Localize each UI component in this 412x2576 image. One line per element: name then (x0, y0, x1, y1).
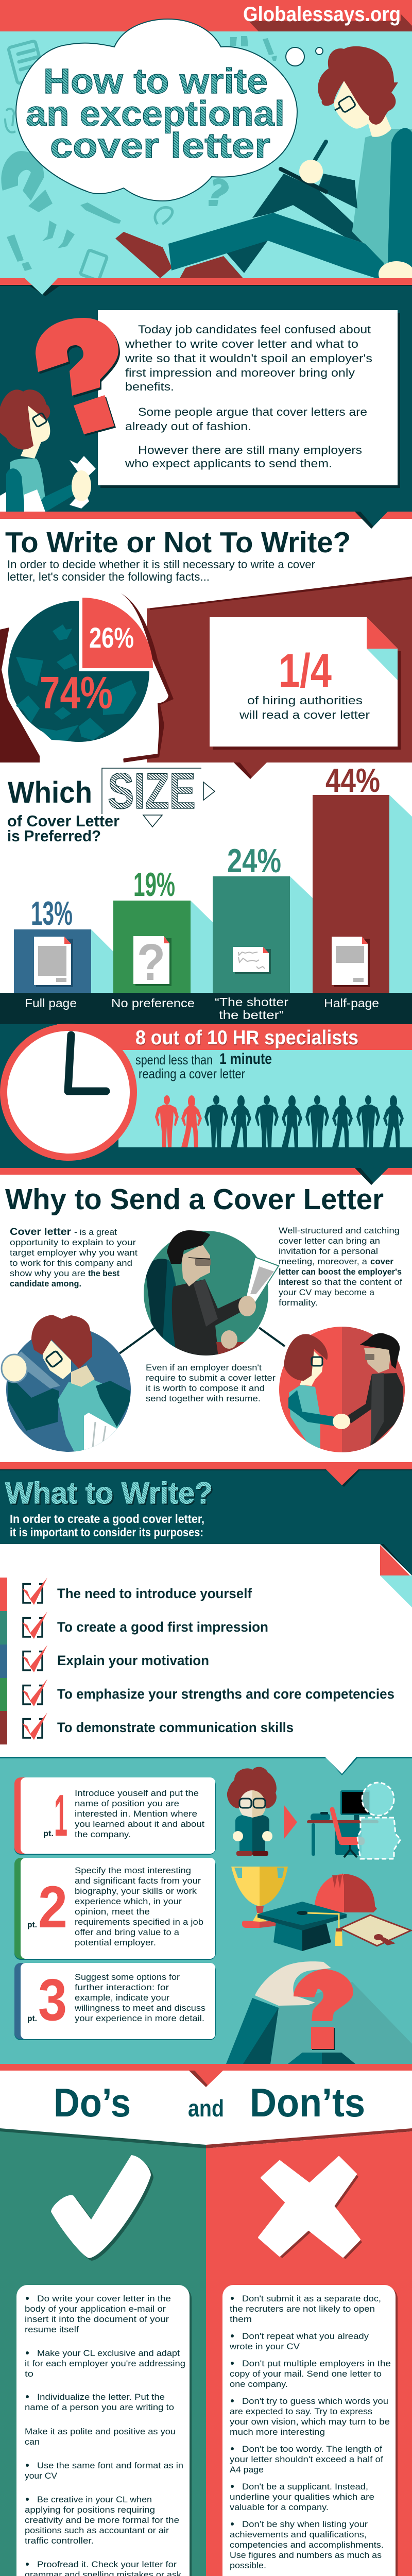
card: donts list: them (230, 2315, 252, 2324)
card: donts list: competencies and accomplishments. (230, 2540, 384, 2550)
panel: HR specialists: 8 out of 10 HR specialists (135, 1027, 358, 1049)
panel: intro text card: However there are still many employers (138, 444, 362, 456)
card: donts list: underline your qualities which are (230, 2493, 374, 2502)
chart: head pie: 74% (40, 667, 113, 718)
card: dos list: Individualize the letter. Put the (37, 2393, 165, 2402)
heading: which size: SIZE (108, 762, 196, 819)
panel: intro text card: benefits. (125, 380, 174, 393)
chart labels band: “The shotter (215, 995, 288, 1009)
card: donts list: Don't be too wordy. The length of (242, 2445, 382, 2454)
card: dos list: name of a person you are writing to (25, 2403, 174, 2412)
text block: cover letter definition: show why you are (10, 1269, 85, 1278)
header band (0, 0, 412, 31)
card: donts list: much more interesting (230, 2428, 325, 2437)
text block: well-structured letter: so that the content of (312, 1278, 402, 1287)
checklist: purposes: Explain your motivation (57, 1653, 209, 1668)
what to write header: In order to create a good cover letter, (10, 1512, 204, 1526)
text block: cover letter definition: opportunity to explain to your (10, 1238, 136, 1247)
illustration: vacant desk (307, 1783, 401, 1859)
card: donts list: Don't be a supplicant. Instead, (242, 2482, 368, 2492)
card: donts list: wrote in your CV (229, 2342, 300, 2351)
card: point 2: biography, your skills or work (75, 1887, 197, 1896)
card: donts list: Don't try to guess which words you (242, 2397, 388, 2406)
card: point 1: you learned about it and about (75, 1820, 204, 1829)
checklist: purposes: To demonstrate communication skills (57, 1720, 294, 1735)
icon: half page document (332, 937, 370, 987)
card: point 3: pt. (27, 2014, 37, 2023)
card: dos list (16, 2285, 192, 2576)
card: point 2: opinion, meet the (75, 1907, 150, 1917)
card: dos list: applying for positions requiring (25, 2505, 155, 2515)
heading: dos and donts: Do’s (54, 2080, 131, 2125)
checklist: purposes: To emphasize your strengths and core competencies (57, 1686, 394, 1702)
text block: well-structured letter: Well-structured and catching (279, 1226, 400, 1235)
card: dos list: Be creative in your CL when (37, 2495, 152, 2504)
text block: even if not required: it is worth to compose it and (146, 1384, 265, 1393)
text block: well-structured letter: meeting, moreover, a (279, 1257, 368, 1266)
card: dos list: to (25, 2369, 33, 2379)
card: dos list: resume itself (25, 2325, 79, 2334)
thought cloud with title: an exceptional (26, 94, 285, 133)
text block: cover letter definition: the best (88, 1269, 119, 1278)
panel: HR specialists: 8 out of 10 HR specialists (136, 1028, 359, 1050)
card: donts list: are expected to say. Try to express (230, 2407, 372, 2416)
panel: HR specialists: spend less than (135, 1052, 213, 1067)
card: dos list: creativity and be more formal for the (25, 2516, 179, 2525)
text block: even if not required (146, 1363, 276, 1403)
hero person writing (115, 46, 412, 287)
panel: HR specialists: reading a cover letter (139, 1066, 245, 1081)
panel: HR specialists: 1 minute (219, 1050, 272, 1067)
card: point 2: 2 (38, 1874, 67, 1940)
header logo: Globalessays.org (243, 3, 401, 26)
panel: tips background (0, 1756, 412, 2064)
card: dos list: Do write your cover letter in the (37, 2294, 171, 2303)
panel: intro text card: write so that it wouldn't spoil an employer's (125, 352, 372, 365)
illustration: curly-haired person (227, 1767, 277, 1856)
card: point 3: Suggest some options for (75, 1973, 180, 1982)
text block: well-structured letter: invitation for a personal (279, 1247, 378, 1256)
panel: intro text card: first impression and moreover bring only (125, 366, 355, 379)
card: point 1: interested in. Mention where (75, 1809, 197, 1819)
card: point 3: 3 (38, 1967, 67, 2033)
illustration: trophy (231, 1867, 288, 1928)
card: dos list: Make your CL exclusive and adapt (37, 2349, 180, 2358)
bar chart: cover letter size (14, 761, 412, 993)
thought cloud with title: cover letter (50, 126, 270, 165)
card: point 1: name of position you are (75, 1799, 179, 1808)
card: point 1: Introduce youself and put the (75, 1789, 199, 1798)
person holding scroll (0, 389, 96, 512)
card: dos list: can (25, 2437, 40, 2447)
illustration: hand with question mark (226, 1961, 412, 2064)
heading: dos and donts: and (188, 2095, 224, 2122)
chart labels band: Full page (25, 996, 77, 1010)
section band (0, 512, 412, 529)
connector lines (119, 1328, 285, 1353)
bar chart: cover letter size: 13% (31, 894, 73, 932)
intro top band (0, 278, 412, 296)
checklist: purposes: To create a good first impression (57, 1619, 268, 1635)
card: donts list: one company. (230, 2380, 288, 2389)
chart labels band: the better” (219, 1008, 284, 1022)
panel: HR specialists (0, 1024, 412, 1168)
icon: clock (0, 1024, 137, 1161)
card: dos list: Proofread it. Check your letter for (37, 2560, 177, 2569)
heading: why to send a cover letter: Why to Send a Cover Letter (5, 1183, 384, 1216)
card: donts list: A4 page (230, 2465, 264, 2475)
callout: 1/4 note (210, 617, 401, 750)
what to write header: What to Write? (7, 1478, 214, 1512)
card: donts list: your letter shouldn't exceed a half of (230, 2455, 383, 2464)
card: dos list: Make it as polite and positive as you (25, 2427, 176, 2436)
card: donts list: valuable for a company. (230, 2503, 329, 2512)
panel: intro text card: whether to write cover letter and what to (125, 337, 358, 350)
card: point 3 (14, 1963, 216, 2040)
card: donts list: the recruters are not likely to open (230, 2304, 375, 2314)
thought cloud with title: How to write (43, 61, 268, 101)
text block: even if not required: send together with resume. (146, 1394, 261, 1403)
panel: intro text card: Some people argue that cover letters are (138, 405, 367, 418)
text block: facts intro (7, 558, 315, 583)
card: point 2: potential employer. (75, 1938, 156, 1947)
bar chart: cover letter size: 24% (227, 842, 281, 879)
arrow (284, 1805, 297, 1839)
card: dos list: positions such as accountant or air (25, 2526, 169, 2535)
heading: dos and donts (54, 2080, 365, 2125)
card: donts list: copy of your mail. Send one letter to (230, 2369, 382, 2379)
card: point 2: Specify the most interesting (75, 1866, 191, 1875)
heading: which size: Which (8, 776, 92, 809)
illustration: graduation cap (258, 1902, 347, 1951)
text block: well-structured letter: cover letter can bring an (279, 1236, 380, 1246)
icon: question document: ? (137, 934, 165, 991)
section band (0, 1168, 412, 1185)
illustration: diploma (340, 1915, 411, 1946)
card: point 1 (14, 1777, 216, 1855)
text block: well-structured letter: letter can boost the employer's (279, 1267, 402, 1277)
text block: cover letter definition: - is a great (74, 1228, 117, 1237)
what to write header (0, 1462, 412, 1544)
pointer (234, 762, 267, 779)
card: dos list: your CV (25, 2471, 57, 2481)
card: donts list: Don’t be shy when listing your (242, 2520, 368, 2529)
card: point 2 (14, 1858, 216, 1960)
panel: intro text card: who expect applicants to send them. (125, 457, 332, 470)
checklist: purposes (22, 1578, 394, 1740)
chart labels band (0, 993, 412, 1024)
card: dos list: Use the same font and format as in (37, 2461, 183, 2470)
card: donts list (222, 2285, 398, 2576)
panel: intro text card: Today job candidates feel confused about (138, 323, 371, 336)
card: dos list: body of your application e-mail or (25, 2304, 166, 2314)
card: point 3: your experience in more detail. (75, 2014, 204, 2023)
text block: cover letter definition (10, 1227, 138, 1289)
card: donts list: possible. (230, 2561, 266, 2570)
panel: intro text card: already out of fashion. (125, 420, 251, 433)
card: donts list: achievements and qualifications, (230, 2530, 367, 2539)
card: donts list: Use figures and numbers as much as (230, 2551, 382, 2560)
illustration: reader in armchair (144, 1230, 279, 1360)
panel: facts background (0, 577, 412, 762)
text block: well-structured letter: formality. (279, 1298, 318, 1308)
chart labels band: Half-page (324, 996, 379, 1010)
card: dos list: traffic controller. (25, 2536, 94, 2546)
bar chart: cover letter size: 19% (133, 866, 175, 903)
card: point 3: further interaction: for (75, 1983, 169, 1992)
panel: intro background (0, 285, 412, 512)
heading: to write or not to write: To Write or Not To Write? (5, 526, 351, 559)
illustration: handshake (279, 1327, 405, 1455)
icon: big question mark (36, 318, 120, 436)
side colour strips (0, 1578, 7, 1744)
chart labels band: No preference (111, 996, 195, 1010)
card: dos list: it for each employer you're addressing (25, 2359, 185, 2368)
card: point 1: the company. (75, 1830, 131, 1839)
heading: which size: is Preferred? (7, 827, 101, 845)
card: donts list: Don't put multiple employers in the (242, 2359, 391, 2368)
panel: dos (0, 2128, 206, 2576)
card: donts list: Don't repeat what you already (242, 2332, 369, 2341)
card: point 1: 1 (54, 1783, 67, 1849)
card: point 2: requirements specified in a job (75, 1918, 203, 1927)
card: point 3: willingness to meet and discuss (74, 2004, 205, 2013)
corner ribbon (380, 1544, 412, 1607)
heading: which size (7, 762, 215, 845)
card: dos list: insert it into the document of your (25, 2315, 169, 2324)
text block: well-structured letter: cover (370, 1257, 394, 1266)
panel: donts (206, 2128, 412, 2576)
checklist: purposes: The need to introduce yourself (57, 1586, 252, 1601)
people row: 2 of 10 highlighted (155, 1095, 404, 1147)
text block: even if not required: require to submit a cover letter (146, 1374, 276, 1383)
heading: which size: of Cover Letter (7, 812, 119, 830)
text block: cover letter definition: target employer why you want (10, 1248, 138, 1258)
text block: cover letter definition: to work for this company and (10, 1259, 132, 1268)
card: point 2: and significant facts from your (75, 1876, 201, 1886)
text block: facts intro: letter, let's consider the following facts... (7, 570, 210, 583)
text block: well-structured letter: your CV may become a (279, 1288, 375, 1297)
icon: full page document (34, 937, 73, 987)
card: donts list: your own vision, which may turn to be (230, 2417, 390, 2427)
card: donts list: Don't submit it as a separate doc, (242, 2294, 381, 2303)
callout: 1/4 note: of hiring authorities (247, 694, 363, 707)
card: point 2: experience which, in your (75, 1897, 182, 1906)
panel: intro text card (98, 310, 400, 488)
chart: head pie: 26% (89, 621, 134, 654)
card: point 2: offer and bring value to a (75, 1928, 180, 1937)
illustration: person with paper (2, 1315, 131, 1455)
heading: dos and donts: Don’ts (250, 2080, 365, 2125)
thought cloud with title (16, 19, 323, 201)
background doodles (1, 36, 277, 281)
callout: 1/4 note: will read a cover letter (239, 708, 370, 721)
hero background (0, 31, 412, 278)
card: point 2: pt. (27, 1921, 37, 1929)
icon: short note (233, 947, 271, 974)
section band (0, 2064, 412, 2087)
card: point 1: pt. (43, 1829, 54, 1838)
what to write header: it is important to consider its purposes: (10, 1526, 203, 1539)
text block: facts intro: In order to decide whether it is still necessary to write a cover (7, 558, 315, 571)
text block: well-structured letter (279, 1226, 402, 1308)
bar chart: cover letter size: 44% (325, 761, 380, 799)
text block: cover letter definition: candidate among. (10, 1279, 81, 1289)
chart: head pie (8, 598, 153, 742)
text block: even if not required: Even if an employer doesn't (146, 1363, 262, 1372)
text block: cover letter definition: Cover letter (10, 1227, 72, 1238)
illustration: hard hat (314, 1873, 377, 1912)
callout: 1/4 note: 1/4 (279, 645, 332, 697)
what to write header: What to Write? (5, 1477, 213, 1510)
card: point 3: example, indicate your (75, 1993, 170, 2003)
text block: well-structured letter: interest (279, 1278, 308, 1287)
